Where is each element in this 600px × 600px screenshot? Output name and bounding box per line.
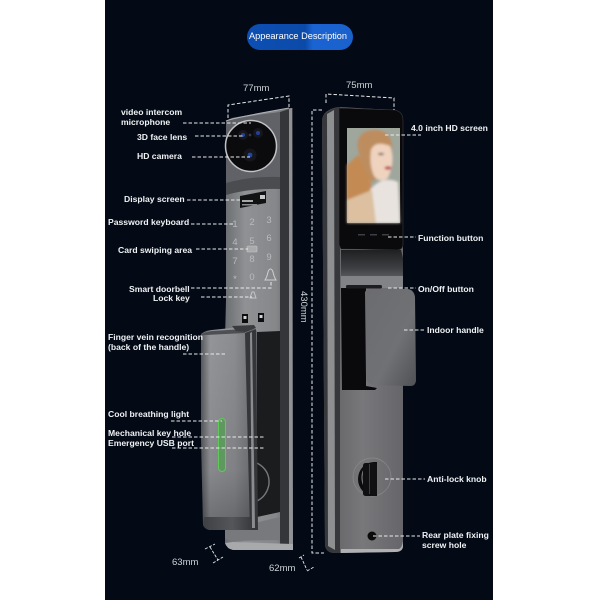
password keyboard digits: 1	[232, 219, 238, 230]
callout: on/off button	[388, 284, 474, 294]
password keyboard digits: 5	[249, 236, 255, 247]
callout: indoor handle: Indoor handle	[427, 325, 484, 335]
green breathing light	[218, 418, 226, 472]
callout: smart doorbell	[129, 280, 271, 294]
password keyboard digits: 9	[266, 252, 272, 263]
background panel	[105, 0, 493, 600]
callout: 4.0 inch HD screen: 4.0 inch HD screen	[411, 123, 488, 133]
password keyboard digits: 3	[266, 215, 272, 226]
callout: rear plate fixing screw hole: Rear plate fixing	[422, 530, 489, 540]
password keyboard digits: 8	[249, 254, 255, 265]
anti-lock knob	[353, 458, 391, 496]
callout: video intercom microphone: video intercom	[121, 107, 182, 117]
password keyboard digits: 2	[249, 217, 255, 228]
card swiping icon	[247, 246, 257, 252]
screw hole	[368, 532, 376, 540]
front lock body	[225, 108, 293, 550]
callout: rear plate fixing screw hole: screw hole	[422, 540, 467, 550]
callout: anti-lock knob	[385, 474, 487, 484]
rear lock body	[322, 107, 416, 553]
callout: card swiping area	[118, 245, 248, 255]
password keyboard digits: 0	[249, 272, 255, 283]
callout: 4.0 inch HD screen	[385, 123, 488, 135]
dimension: 63mm	[172, 544, 223, 568]
dimension: 430mm: 430mm	[298, 291, 309, 323]
callout: function button	[388, 233, 483, 243]
callout: finger vein recognition	[108, 332, 226, 354]
callout: finger vein recognition: Finger vein recognition	[108, 332, 203, 342]
screen photo	[347, 128, 400, 223]
display screen	[240, 191, 266, 208]
dimension: 77mm: 77mm	[243, 83, 269, 94]
password keyboard digits: 4	[232, 237, 238, 248]
dimension: 63mm: 63mm	[172, 557, 198, 568]
thumb latch	[257, 463, 269, 501]
callout: anti-lock knob: Anti-lock knob	[427, 474, 487, 484]
title pill	[247, 24, 353, 50]
title pill: Appearance Description	[249, 31, 347, 41]
camera module	[226, 120, 276, 172]
callout: cool breathing light	[108, 409, 222, 421]
callout: rear plate fixing screw hole	[373, 530, 489, 550]
right callouts	[373, 123, 489, 550]
left callouts	[108, 107, 271, 448]
callout: video intercom microphone	[121, 107, 251, 127]
dimension: 62mm	[269, 555, 314, 574]
dimension: 75mm: 75mm	[346, 80, 372, 91]
on/off button	[346, 285, 382, 288]
neck section	[341, 250, 403, 276]
callout: cool breathing light: Cool breathing light	[108, 409, 189, 419]
dark rear recess	[257, 331, 280, 517]
callout: function button: Function button	[418, 233, 483, 243]
callout: 3D face lens: 3D face lens	[137, 132, 187, 142]
callout: lock key: Lock key	[153, 293, 190, 303]
rear recess	[341, 288, 377, 390]
function buttons	[358, 234, 389, 236]
dimension: 75mm	[326, 80, 394, 110]
password keyboard digits: 6	[266, 233, 272, 244]
callout: 3D face lens	[137, 132, 243, 142]
dimension: 62mm: 62mm	[269, 563, 295, 574]
lock key icon	[250, 292, 256, 298]
callout: mechanical key hole: Mechanical key hole	[108, 428, 191, 438]
callout: display screen: Display screen	[124, 194, 185, 204]
callout: video intercom microphone: microphone	[121, 117, 170, 127]
callout: display screen	[124, 194, 242, 204]
handle direction marks	[242, 313, 264, 323]
password keyboard digits: *	[233, 274, 237, 285]
callout: password keyboard	[108, 217, 234, 227]
callout: on/off button: On/Off button	[418, 284, 474, 294]
base plate	[225, 517, 280, 541]
callout: HD camera: HD camera	[137, 151, 182, 161]
callout: finger vein recognition: (back of the handle)	[108, 342, 189, 352]
password keyboard digits	[232, 215, 272, 285]
callout: card swiping area: Card swiping area	[118, 245, 192, 255]
callout: emergency USB port: Emergency USB port	[108, 438, 194, 448]
indoor handle	[365, 289, 416, 386]
callout: lock key	[153, 293, 252, 303]
outdoor handle	[201, 325, 258, 530]
dimension: 77mm	[228, 83, 289, 118]
callout: smart doorbell: Smart doorbell	[129, 284, 190, 294]
dimension: 430mm	[298, 110, 324, 553]
callout: password keyboard: Password keyboard	[108, 217, 189, 227]
password keyboard digits: 7	[232, 256, 238, 267]
doorbell icon	[265, 269, 276, 280]
callout: HD camera	[137, 151, 250, 161]
